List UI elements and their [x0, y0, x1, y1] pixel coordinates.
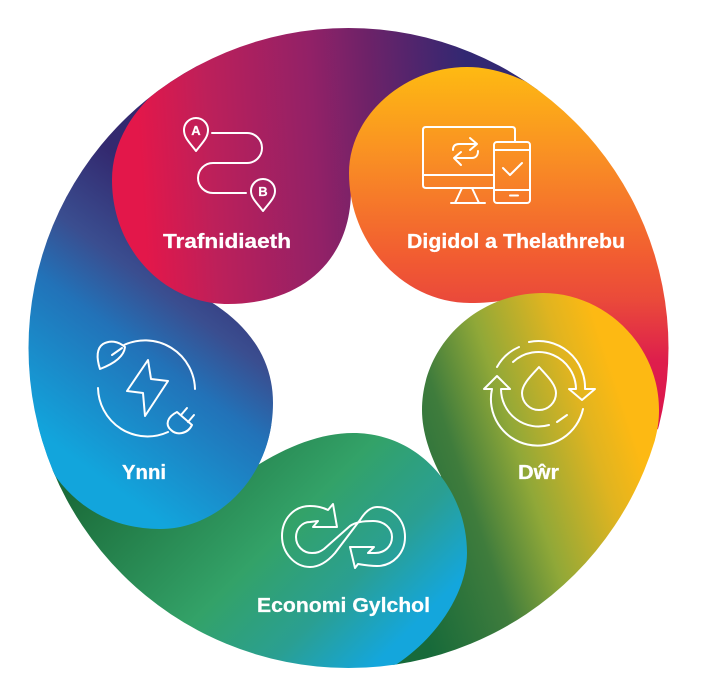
icon: circular infinity arrows: [282, 504, 405, 568]
label: Digidol a Thelathrebu: Digidol a Thelathrebu: [407, 231, 625, 253]
shape: Ynni petal tail: [28, 66, 273, 477]
panel: Economi Gylchol: [52, 433, 467, 668]
icon: water drop in cycle: [484, 341, 595, 446]
panel: Digidol a Thelathrebu: [349, 67, 700, 430]
shape: Ynni petal head: [38, 425, 272, 529]
shape: Trafnidiaeth petal: [112, 0, 540, 304]
label: Trafnidiaeth: Trafnidiaeth: [163, 231, 291, 253]
panel: Trafnidiaeth: [112, 0, 540, 304]
panel: Ynni: [38, 339, 272, 529]
icon: route from A to B: [184, 118, 275, 211]
icon: route from A to B: A: [191, 123, 201, 138]
shape: Economi Gylchol petal: [52, 433, 467, 668]
icon: route from A to B: B: [258, 184, 268, 199]
label: Economi Gylchol: Economi Gylchol: [257, 595, 430, 617]
panel: Dŵr: [392, 293, 659, 665]
shape: Dŵr petal: [392, 293, 659, 665]
icon: energy bolt, leaf and plug: [98, 340, 195, 436]
icon: computer and phone: [423, 127, 530, 203]
shape: Digidol petal: [349, 67, 700, 430]
label: Dŵr: Dŵr: [518, 462, 559, 484]
label: Ynni: Ynni: [122, 462, 166, 484]
